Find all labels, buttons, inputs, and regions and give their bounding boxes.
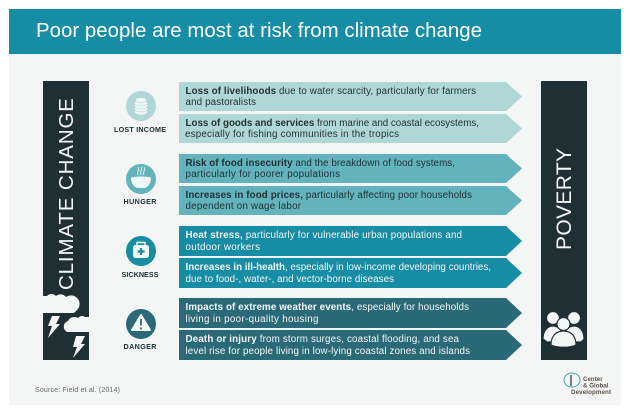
icon: storm clouds (43, 294, 89, 358)
arrow: ill-health: Increases in ill-health, especially in low-income developing countries, (186, 262, 491, 273)
arrow: food prices: Increases in food prices, particularly affecting poor households (186, 190, 472, 201)
arrow: heat stress: outdoor workers (186, 242, 260, 253)
arrow: extreme weather (179, 298, 522, 328)
arrow: food insecurity (179, 154, 522, 183)
source note: Source: Field et al. (2014) (35, 387, 120, 394)
category: lost income (114, 91, 166, 134)
logo: center for global development: Center (583, 376, 603, 383)
arrow: loss of livelihoods: Loss of livelihoods due to water scarcity, particularly for farmers (186, 86, 476, 97)
arrow: death or injury (179, 330, 522, 360)
panel: climate change bar (43, 81, 89, 360)
arrow: loss of goods and services (179, 114, 522, 143)
category: hunger (124, 164, 157, 206)
logo mark (564, 373, 580, 387)
icon: warning triangle (126, 309, 156, 339)
arrow: food insecurity: particularly for poorer populations (186, 169, 340, 180)
title banner (9, 9, 621, 54)
title banner: Poor people are most at risk from climate change (36, 20, 482, 42)
logo: center for global development (564, 373, 611, 396)
panel: poverty bar (541, 81, 587, 360)
arrow: extreme weather: living in poor-quality housing (186, 314, 318, 325)
label: sickness: SICKNESS (122, 270, 159, 279)
label: lost income: LOST INCOME (114, 125, 166, 134)
label: hunger: HUNGER (124, 197, 157, 206)
icon: bowl (126, 164, 156, 194)
arrow: loss of goods and services: especially for fishing communities in the tropics (185, 129, 399, 140)
arrow: ill-health (179, 258, 522, 288)
arrow: death or injury: level rise for people living in low-lying coastal zones and islands (186, 346, 470, 357)
arrow: extreme weather: Impacts of extreme weather events, especially for households (186, 302, 469, 313)
logo: center for global development: & Global (583, 382, 609, 390)
label: danger: DANGER (124, 342, 157, 351)
arrow: death or injury: Death or injury from storm surges, coastal flooding, and sea (186, 334, 460, 345)
arrow: food prices: dependent on wage labor (186, 201, 302, 212)
arrow: ill-health: due to food-, water-, and vector-borne diseases (186, 274, 394, 285)
arrow: food insecurity: Risk of food insecurity and the breakdown of food systems, (186, 158, 455, 169)
icon: coins (126, 91, 156, 121)
arrow: loss of goods and services: Loss of goods and services from marine and coastal ecosystems, (186, 118, 479, 129)
poverty label: POVERTY (553, 148, 576, 250)
climate change label: CLIMATE CHANGE (55, 98, 78, 290)
arrow: heat stress (179, 226, 522, 256)
arrow: heat stress: Heat stress, particularly for vulnerable urban populations and (186, 230, 462, 241)
icon: first aid kit (126, 236, 156, 266)
logo: center for global development: Development (571, 389, 611, 396)
arrow: loss of livelihoods: and pastoralists (186, 97, 256, 108)
arrow: loss of livelihoods (179, 82, 522, 111)
category: danger (124, 309, 157, 351)
category: sickness (122, 236, 159, 279)
icon: people group (543, 312, 584, 347)
arrow: food prices (179, 186, 522, 215)
